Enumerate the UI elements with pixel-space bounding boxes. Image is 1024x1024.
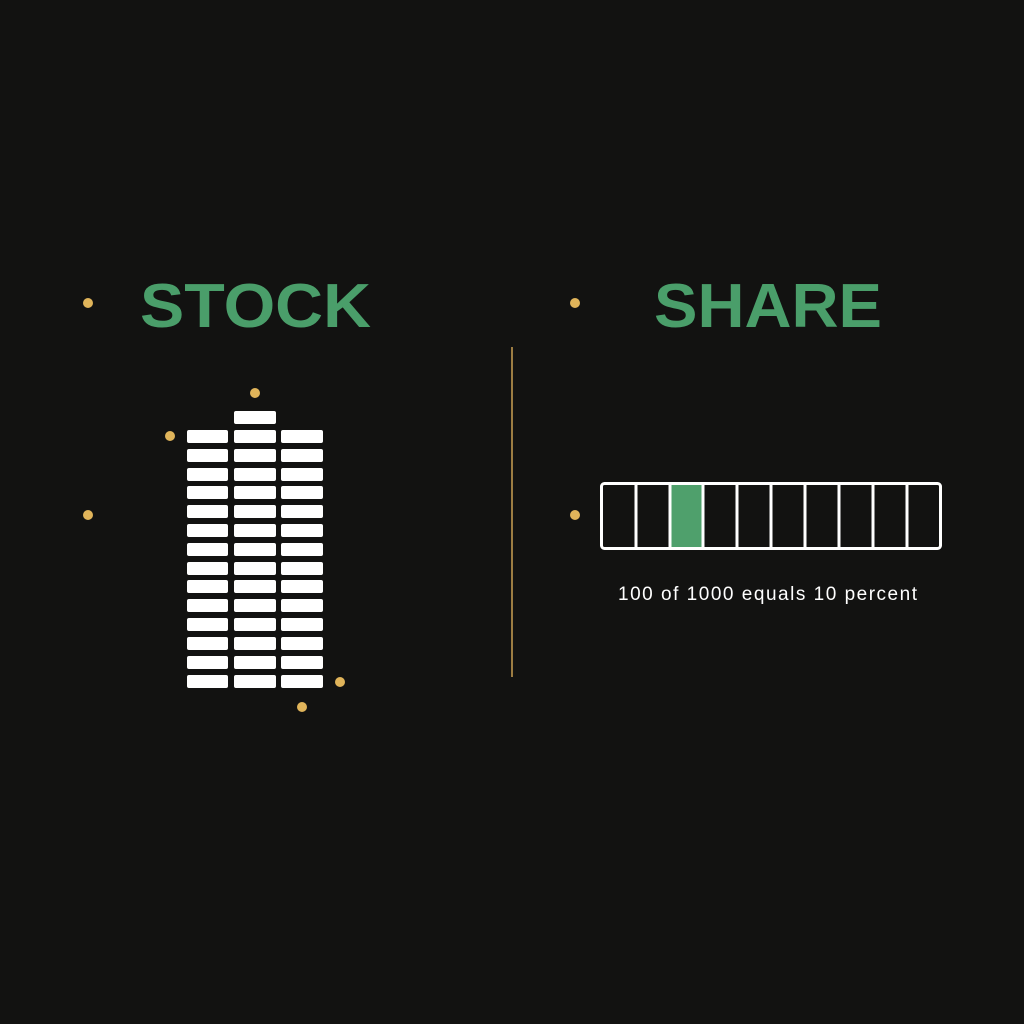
caption: 100 of 1000 equals 10 percent — [618, 584, 918, 605]
decorative dots — [83, 298, 580, 712]
chart: share bar of ten cells — [602, 484, 940, 548]
title: SHARE: SHARE — [654, 272, 882, 341]
title: STOCK: STOCK — [140, 272, 371, 341]
icon: stock grid of blocks — [187, 411, 323, 688]
divider line — [511, 347, 513, 677]
